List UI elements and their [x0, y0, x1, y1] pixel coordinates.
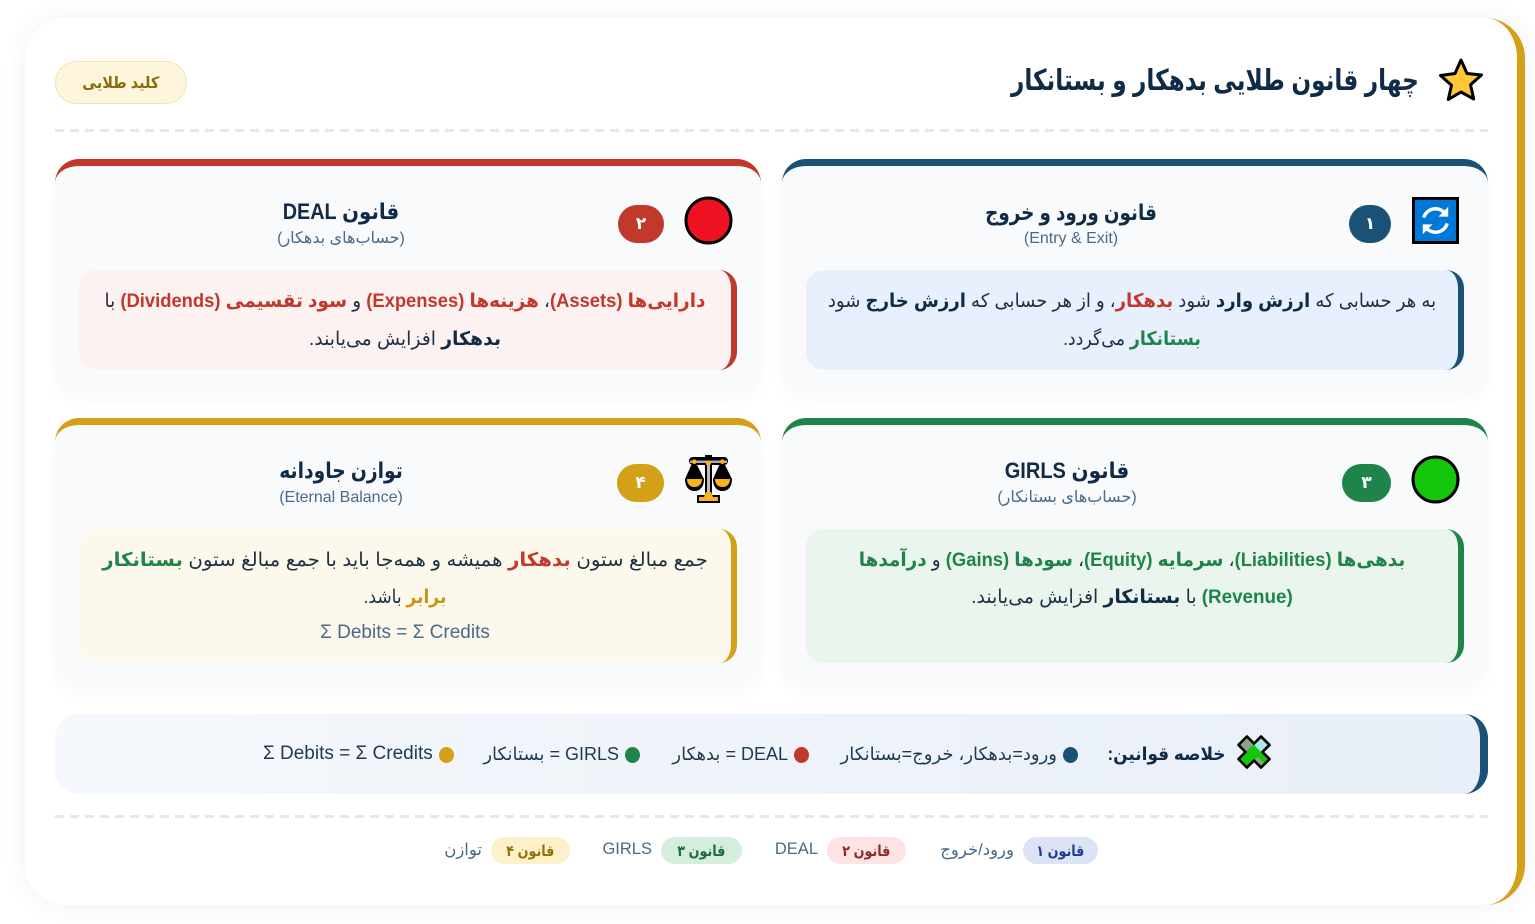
panel: rule 2 DEAL	[55, 159, 761, 396]
subheading rule 2: (حساب‌های بدهکار)	[277, 230, 405, 247]
badge: golden key	[55, 61, 187, 104]
icon: star	[1438, 58, 1483, 101]
subheading rule 3: (حساب‌های بستانکار)	[997, 489, 1137, 506]
text box rule 4	[79, 529, 737, 663]
subheading rule 1: (Entry & Exit)	[1024, 230, 1118, 247]
icon: red circle	[684, 196, 732, 244]
title: چهار قانون طلایی بدهکار و بستانکار	[1011, 65, 1419, 97]
footer tag 2: قانون ۲	[842, 842, 891, 860]
number 1	[1349, 205, 1391, 243]
legend 3 text: GIRLS = بستانکار	[483, 744, 619, 764]
legend 3	[625, 747, 640, 763]
subheading rule 4: (Eternal Balance)	[279, 489, 403, 506]
heading rule 1: قانون ورود و خروج	[985, 200, 1157, 225]
panel: summary	[55, 714, 1488, 794]
footer tag 1	[1023, 837, 1098, 864]
footer tag 1: قانون ۱	[1036, 842, 1085, 860]
icon: refresh	[1412, 197, 1459, 244]
text line: بستانکار می‌گردد.	[1063, 329, 1201, 350]
number 3: ۳	[1361, 473, 1372, 492]
number 3	[1342, 464, 1391, 502]
badge: golden key: کلید طلایی	[83, 74, 159, 92]
panel: rule 3 GIRLS	[782, 418, 1488, 688]
legend 4	[439, 747, 454, 763]
text box rule 1	[806, 270, 1464, 370]
summary heading: خلاصه قوانین:	[1107, 744, 1225, 764]
heading rule 4: توازن جاودانه	[279, 458, 403, 483]
footer label 3: GIRLS	[602, 840, 652, 858]
text line: دارایی‌ها (Assets)، هزینه‌ها (Expenses) و سود تقسیمی (Dividends) با	[105, 291, 705, 312]
number 4: ۴	[635, 473, 646, 492]
panel: rule 4 balance	[55, 418, 761, 688]
text line: به هر حسابی که ارزش وارد شود بدهکار، و از هر حسابی که ارزش خارج شود	[828, 291, 1436, 312]
panel: rule 1 entry and exit	[782, 159, 1488, 396]
text line: (Revenue) با بستانکار افزایش می‌یابند.	[971, 587, 1293, 608]
heading rule 3: قانون GIRLS	[1005, 458, 1129, 483]
footer tag 2	[827, 837, 906, 864]
number 2: ۲	[636, 214, 646, 233]
icon: scales	[685, 455, 732, 503]
number 2	[618, 205, 664, 243]
number 1: ۱	[1365, 214, 1375, 233]
text box rule 3	[806, 529, 1464, 663]
footer tag 3	[661, 837, 742, 864]
icon: puzzle	[1237, 735, 1271, 769]
footer label 4: توازن	[444, 841, 482, 859]
text line: جمع مبالغ ستون بدهکار همیشه و همه‌جا باید با جمع مبالغ ستون بستانکار	[102, 550, 708, 571]
icon: green circle	[1412, 456, 1460, 504]
legend 4 text: Σ Debits = Σ Credits	[263, 743, 433, 764]
legend 1 text: ورود=بدهکار، خروج=بستانکار	[841, 744, 1057, 764]
legend 2 text: DEAL = بدهکار	[672, 744, 788, 764]
legend 2	[794, 747, 809, 763]
legend 1	[1063, 747, 1078, 763]
text line: برابر باشد.	[364, 587, 446, 608]
footer label 1: ورود/خروج	[940, 841, 1014, 859]
footer tag 4	[491, 837, 570, 864]
footer tag 3: قانون ۳	[677, 842, 726, 860]
number 4	[617, 464, 664, 502]
footer tag 4: قانون ۴	[506, 842, 555, 860]
formula: Σ Debits = Σ Credits	[320, 622, 490, 643]
text line: بدهی‌ها (Liabilities)، سرمایه (Equity)، سودها (Gains) و درآمدها	[859, 550, 1405, 571]
heading rule 2: قانون DEAL	[283, 199, 399, 224]
footer label 2: DEAL	[775, 840, 818, 858]
text line: بدهکار افزایش می‌یابند.	[309, 329, 501, 350]
text box rule 2	[79, 270, 737, 370]
